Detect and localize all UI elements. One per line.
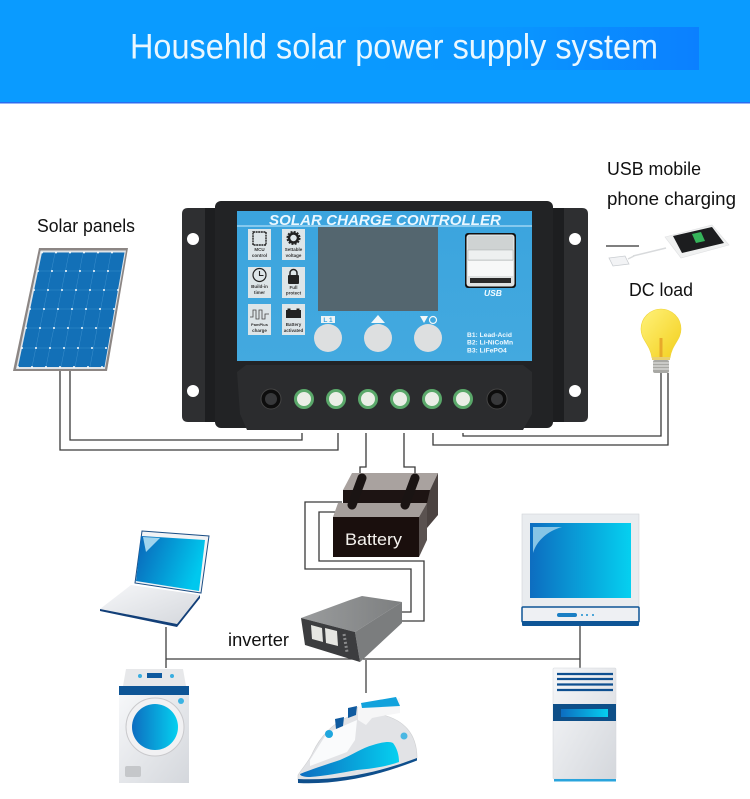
icon: washing machine bbox=[119, 669, 189, 783]
icon: light bulb bbox=[641, 309, 681, 373]
left mounting flange bbox=[182, 208, 217, 422]
icon: solar panel bbox=[13, 248, 128, 371]
feature badge: build-in timer bbox=[248, 267, 271, 298]
charge controller bbox=[182, 201, 588, 430]
terminal screws bbox=[296, 390, 472, 408]
left terminal strap bbox=[352, 478, 362, 505]
rear battery bbox=[343, 473, 438, 528]
label: solar panels: Solar panels bbox=[37, 216, 135, 236]
terminal block bbox=[237, 365, 532, 430]
feature badge: PWM charge bbox=[248, 304, 271, 335]
right mounting flange bbox=[552, 208, 588, 422]
wiring: controller to DC load bbox=[433, 373, 668, 445]
button: L1 bbox=[314, 316, 342, 352]
line beside phone bbox=[606, 245, 639, 247]
icon: inverter bbox=[301, 596, 402, 662]
header banner bbox=[0, 0, 750, 104]
label: DC load: DC load bbox=[629, 280, 693, 300]
feature badge: MCU control bbox=[248, 229, 271, 260]
battery type legend: B3: LiFePO4 bbox=[467, 348, 507, 354]
feature badge: full protect: Full bbox=[290, 285, 298, 290]
feature badge: MCU control: MCU bbox=[254, 247, 265, 252]
feature badge: build-in timer: Build-in bbox=[251, 284, 268, 289]
button: up bbox=[364, 315, 392, 352]
feature badge: battery activated: Battery bbox=[286, 322, 302, 327]
USB ports bbox=[465, 233, 516, 288]
controller body bbox=[215, 201, 553, 428]
wiring: controller to battery bbox=[360, 433, 415, 474]
USB logo: USB bbox=[484, 288, 502, 298]
left screw hole bbox=[261, 389, 281, 409]
icon: clothes iron bbox=[298, 697, 417, 783]
blue faceplate bbox=[237, 211, 532, 361]
battery type legend: B2: Li-NiCoMn bbox=[467, 340, 513, 346]
icon: air conditioner bbox=[553, 668, 616, 782]
feature badge: battery activated: activated bbox=[284, 328, 304, 333]
label: USB mobile phone charging: phone charging bbox=[607, 189, 736, 209]
feature badge: full protect bbox=[282, 267, 305, 298]
right terminal strap bbox=[405, 478, 415, 505]
wiring: battery to inverter bbox=[305, 502, 424, 621]
feature badge: PWM charge: charge bbox=[252, 328, 267, 333]
battery type legend bbox=[467, 332, 513, 354]
battery type legend: B1: Lead-Acid bbox=[467, 332, 512, 339]
icon: phone with USB cable bbox=[609, 225, 729, 266]
feature badge: full protect: protect bbox=[286, 290, 302, 296]
icon: battery pair bbox=[333, 473, 438, 557]
feature badge: MCU control: control bbox=[252, 253, 267, 258]
feature badge: build-in timer: timer bbox=[254, 290, 265, 295]
right screw hole bbox=[487, 389, 507, 409]
faceplate title: SOLAR CHARGE CONTROLLER bbox=[269, 213, 502, 229]
LCD screen bbox=[318, 227, 438, 311]
wiring: solar panel to controller bbox=[60, 370, 338, 450]
feature badge: settable voltage: voltage bbox=[286, 253, 302, 258]
feature badge: PWM charge: PamPlus bbox=[251, 322, 269, 327]
battery label: Battery bbox=[345, 530, 403, 549]
label: USB mobile phone charging: USB mobile bbox=[607, 159, 701, 179]
icon: laptop bbox=[100, 531, 209, 627]
wiring: AC output lines bbox=[166, 625, 580, 693]
button: down and power bbox=[414, 316, 442, 352]
feature badge: settable voltage: Settable bbox=[285, 247, 303, 252]
label: inverter: inverter bbox=[228, 630, 289, 650]
feature badge: battery activated bbox=[282, 304, 305, 335]
button: L1: L 1 bbox=[323, 317, 333, 324]
icon: television bbox=[522, 514, 639, 626]
label: USB mobile phone charging bbox=[607, 159, 736, 209]
title: Househld solar power supply system bbox=[130, 28, 658, 66]
feature badge: settable voltage bbox=[282, 229, 305, 260]
